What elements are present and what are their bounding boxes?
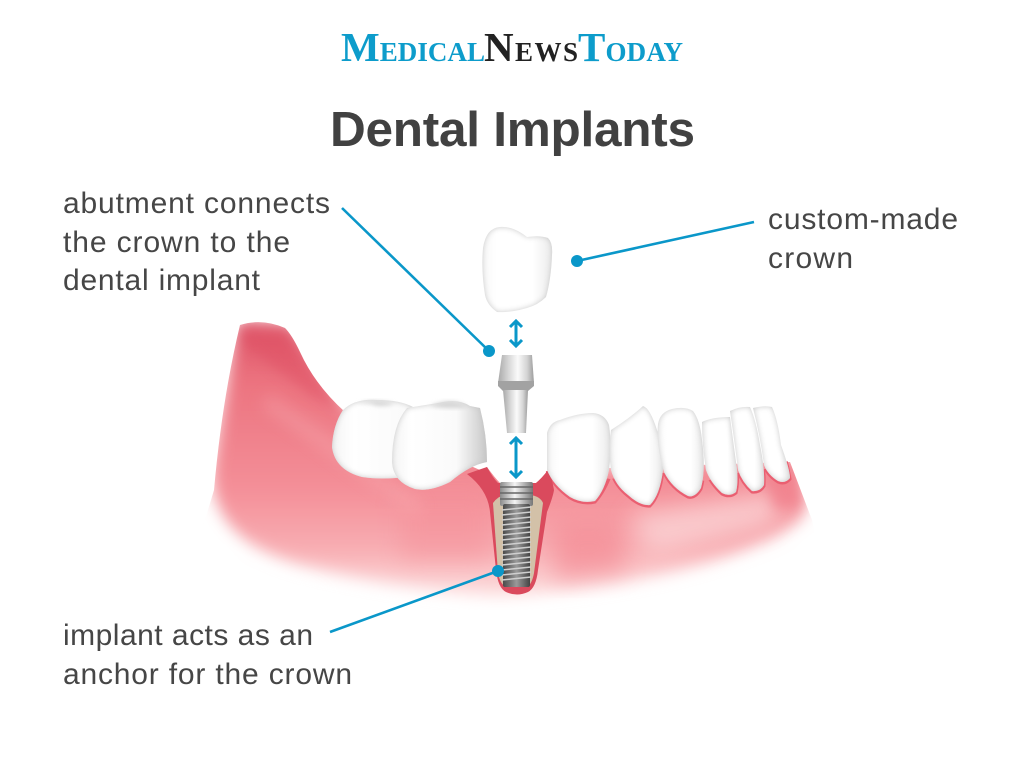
molar cusp shading (358, 401, 468, 408)
label: abutment: dental implant (63, 264, 261, 297)
leader: abutment (342, 208, 495, 357)
label: abutment (63, 187, 330, 297)
tooth 5 (730, 407, 764, 491)
logo: TODAY (578, 24, 683, 70)
arrow: crown to abutment (510, 321, 522, 346)
label: abutment: the crown to the (63, 226, 290, 259)
arrow: abutment to implant (510, 438, 522, 477)
label: abutment: abutment connects (63, 187, 330, 220)
gum (190, 322, 830, 610)
logo: MEDICAL (341, 24, 485, 70)
molar back (332, 400, 440, 478)
logo: NEWS (484, 24, 578, 70)
title: Dental Implants (330, 102, 695, 157)
gum rim under right teeth (546, 461, 792, 508)
tooth 4 (702, 417, 738, 495)
leader: implant (330, 565, 504, 632)
leader: crown (571, 222, 754, 267)
tooth 1 (547, 413, 610, 502)
label: crown: crown (768, 242, 853, 275)
molar teeth left (332, 400, 487, 490)
label: implant: implant acts as an (63, 619, 313, 652)
tooth 2 (610, 406, 663, 505)
label: implant: anchor for the crown (63, 658, 352, 691)
red gum collar (467, 467, 554, 594)
label: crown: custom-made (768, 203, 958, 236)
abutment (498, 355, 534, 433)
label: crown (768, 203, 958, 275)
implant screw (500, 482, 533, 587)
tooth 3 (658, 408, 704, 496)
molar front (392, 401, 487, 490)
logo (341, 24, 683, 70)
implant socket (467, 467, 554, 594)
crown (482, 227, 552, 312)
front teeth right (547, 406, 790, 505)
bone (493, 495, 543, 587)
label: implant (63, 619, 352, 691)
tooth 6 (753, 406, 790, 482)
